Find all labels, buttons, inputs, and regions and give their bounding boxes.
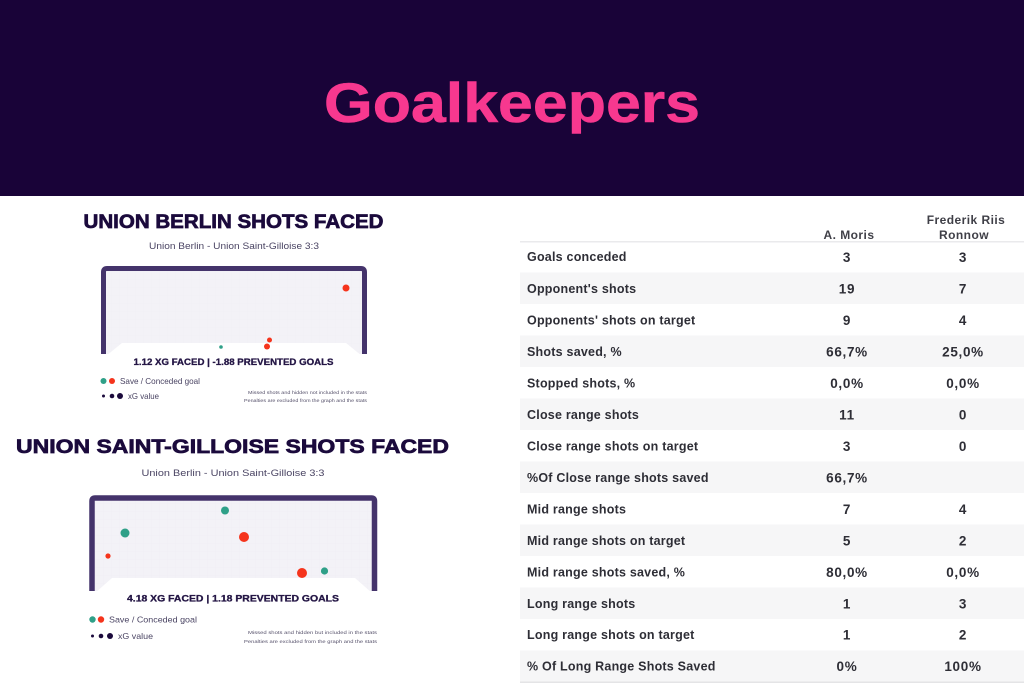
legend: xG value: xG value <box>128 391 159 401</box>
row: Mid range shots <box>527 502 967 517</box>
row: Stopped shots: 0,0% <box>830 376 864 391</box>
row: Close range shots saved: 66,7% <box>826 470 868 486</box>
xG summary: 4.18 XG FACED | 1.18 PREVENTED GOALS <box>127 594 339 604</box>
title: Goalkeepers <box>324 71 700 134</box>
row: Close range shots: 11 <box>839 408 855 422</box>
table header: Frederik Riis <box>927 213 1005 227</box>
row: Long range shots <box>520 588 1024 619</box>
row: Close range shots on target: 3 <box>843 439 851 454</box>
panel: Union Berlin shots faced <box>84 212 384 403</box>
row: Mid range shots on target: 2 <box>959 534 967 548</box>
legend: xG value <box>91 631 153 641</box>
row: Mid range shots: 4 <box>959 502 967 517</box>
row: Opponent's shots: Opponent's shots <box>527 282 636 296</box>
row: Long range shots on target: Long range shots on target <box>527 628 695 642</box>
row: Opponent's shots <box>520 272 1024 304</box>
row: Shots saved: Shots saved, % <box>527 345 622 359</box>
row: Long range shots: 3 <box>959 596 967 612</box>
footnote: Penalties are excluded from the graph and the stats <box>244 639 378 644</box>
row: Long range shots on target <box>527 628 967 642</box>
row: Stopped shots: 0,0% <box>946 376 980 391</box>
row: Close range shots: 0 <box>959 408 967 422</box>
row: Close range shots saved: %Of Close range shots saved <box>527 471 709 485</box>
row: Close range shots: Close range shots <box>527 408 639 422</box>
table header: A. Moris <box>824 228 874 242</box>
row: Mid range shots on target: 5 <box>843 534 851 548</box>
table header <box>520 213 1024 242</box>
row: Mid range shots on target <box>520 524 1024 556</box>
row: Long range shots saved: 100% <box>944 659 982 674</box>
row: Opponents' shots on target: 4 <box>959 313 967 328</box>
row: Opponents' shots on target: Opponents' shots on target <box>527 314 696 328</box>
row: Long range shots: Long range shots <box>527 597 635 611</box>
title banner <box>0 0 1024 196</box>
heading: Union Berlin: UNION BERLIN SHOTS FACED <box>84 212 384 233</box>
row: Opponent's shots: 7 <box>959 282 967 296</box>
row: Long range shots: 1 <box>843 596 851 612</box>
row: Goals conceded <box>527 250 967 265</box>
row: Close range shots <box>520 398 1024 430</box>
row: Mid range shots on target: Mid range shots on target <box>527 534 686 548</box>
goalkeeper stats table <box>520 213 1024 683</box>
footnote: Penalties are excluded from the graph and the stats <box>244 398 368 403</box>
legend: xG value: xG value <box>118 631 153 641</box>
row: Long range shots saved: % Of Long Range Shots Saved <box>527 660 716 674</box>
legend: save and conceded: Save / Conceded goal <box>120 376 200 386</box>
row: Long range shots on target: 2 <box>959 628 967 642</box>
row: Long range shots saved <box>520 650 1024 683</box>
footnote: Missed shots and hidden not included in the stats <box>248 390 368 395</box>
row: Goals conceded: 3 <box>959 250 967 265</box>
xG summary: 1.12 XG FACED | -1.88 PREVENTED GOALS <box>134 357 334 367</box>
row: Mid range shots saved <box>527 565 980 580</box>
row: Shots saved: 25,0% <box>942 344 984 360</box>
row: Mid range shots saved: Mid range shots saved, % <box>527 566 685 580</box>
footnote <box>244 630 378 644</box>
row: Opponents' shots on target: 9 <box>843 313 851 328</box>
row: Close range shots on target: 0 <box>959 439 967 454</box>
row: Shots saved <box>520 336 1024 367</box>
heading: Union Saint-Gilloise: UNION SAINT-GILLOISE SHOTS FACED <box>16 437 449 458</box>
goal graphic with shots <box>104 268 364 356</box>
row: Goals conceded: Goals conceded <box>527 250 627 264</box>
row: Mid range shots: Mid range shots <box>527 502 626 516</box>
match subtitle: Union Berlin - Union Saint-Gilloise 3:3 <box>142 468 324 479</box>
row: Close range shots saved <box>520 462 1024 493</box>
match subtitle: Union Berlin - Union Saint-Gilloise 3:3 <box>149 241 319 252</box>
row: Close range shots on target: Close range shots on target <box>527 440 699 454</box>
row: Mid range shots saved: 0,0% <box>946 565 980 580</box>
row: Opponents' shots on target <box>527 313 967 328</box>
footnote <box>244 390 368 403</box>
row: Goals conceded: 3 <box>843 250 851 265</box>
footnote: Missed shots and hidden but included in the stats <box>248 630 378 635</box>
row: Opponent's shots: 19 <box>839 282 855 296</box>
row: Mid range shots saved: 80,0% <box>826 565 868 580</box>
row: Mid range shots: 7 <box>843 502 851 517</box>
row: Long range shots on target: 1 <box>843 628 851 642</box>
row: Shots saved: 66,7% <box>826 344 868 360</box>
row: Stopped shots <box>527 376 980 391</box>
row: Close range shots on target <box>527 439 967 454</box>
goal graphic with shots <box>92 498 374 593</box>
row: Long range shots saved: 0% <box>837 659 857 674</box>
legend: xG value <box>102 391 159 401</box>
legend: save and conceded: Save / Conceded goal <box>109 614 197 624</box>
row: Stopped shots: Stopped shots, % <box>527 376 635 390</box>
panel: Union Saint-Gilloise shots faced <box>16 437 449 644</box>
table header: Ronnow <box>939 228 989 242</box>
